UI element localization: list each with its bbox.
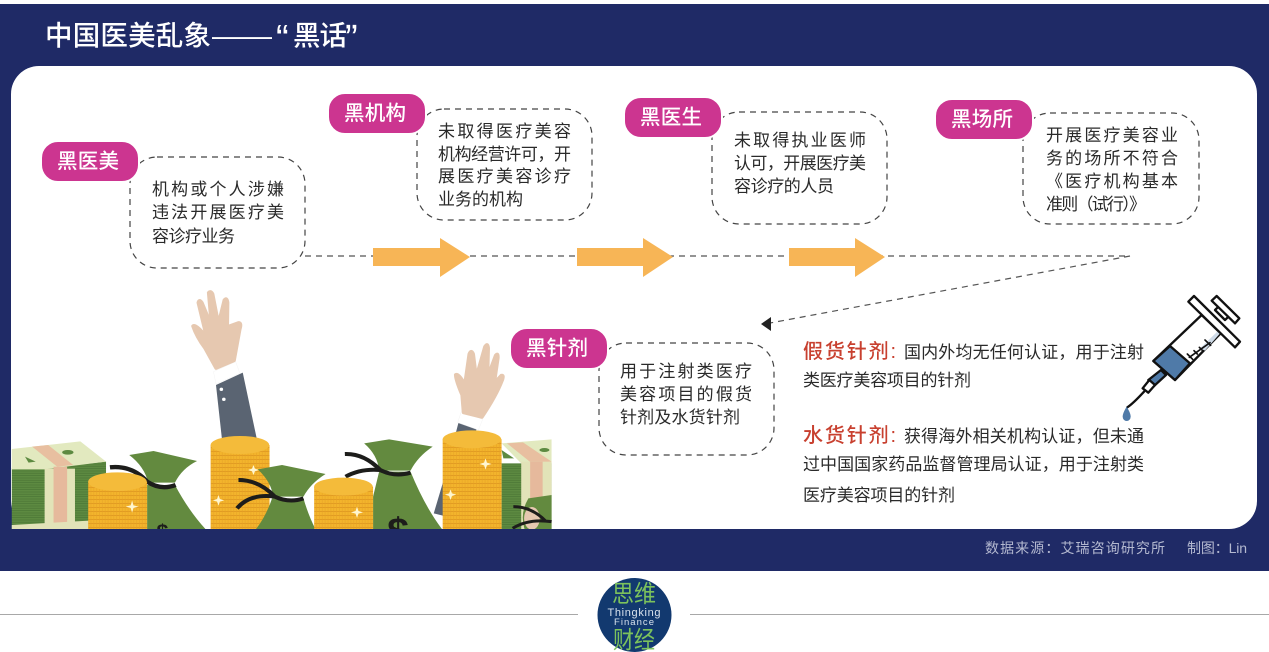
icon: coin stack two xyxy=(211,436,270,532)
panel: 黑医美: 黑医美 xyxy=(57,150,119,173)
icon: coin stack three xyxy=(314,478,373,532)
icon: third money bag xyxy=(344,439,442,529)
panel: 黑针剂: 用于注射类医疗 xyxy=(620,362,752,381)
text block: 假货针剂 definition xyxy=(803,340,1144,390)
panel: 黑医美 xyxy=(41,141,305,268)
text block: 假货针剂 definition: 类医疗美容项目的针剂 xyxy=(803,371,971,390)
arrow: first orange arrow xyxy=(373,238,470,277)
footer divider right xyxy=(690,614,1269,615)
title: 黑话 xyxy=(293,20,347,51)
panel: 黑医生: 未取得执业医师 xyxy=(734,131,866,150)
title: —— xyxy=(212,20,273,51)
panel: 黑医美: 违法开展医疗美 xyxy=(152,203,284,222)
panel: 黑医生: 容诊疗的人员 xyxy=(734,177,834,196)
panel: 黑机构: 未取得医疗美容 xyxy=(438,122,571,141)
illustration: hands, coins and money bags xyxy=(12,292,552,552)
logo: 思维财经 Thingking Finance: Finance xyxy=(614,617,654,628)
icon: first money bag xyxy=(110,451,206,529)
source credit xyxy=(985,540,1247,556)
panel: 黑场所: 《医疗机构基本 xyxy=(1046,172,1178,191)
arrow: second orange arrow xyxy=(577,238,673,277)
panel: 黑医美: 机构或个人涉嫌 xyxy=(152,180,284,199)
arrow: third orange arrow xyxy=(789,238,885,277)
icon: coin stack four xyxy=(443,430,502,532)
panel: 黑针剂: 黑针剂 xyxy=(526,337,588,360)
panel: 黑机构: 机构经营许可，开 xyxy=(438,145,571,164)
panel: 黑场所: 开展医疗美容业 xyxy=(1046,126,1178,145)
title: “ xyxy=(276,18,289,60)
icon: left banknote stack xyxy=(12,441,106,530)
icon: right banknote stack xyxy=(502,439,552,530)
text block: 水货针剂 definition: 水货针剂: xyxy=(803,424,896,447)
panel: 黑机构 xyxy=(328,93,592,220)
logo: 思维财经 Thingking Finance: 思维 xyxy=(612,581,656,608)
source credit: 数据来源：艾瑞咨询研究所 xyxy=(985,540,1165,556)
panel: 黑针剂: 美容项目的假货 xyxy=(620,385,752,404)
icon: second raised hand xyxy=(434,345,503,520)
panel: 黑场所 xyxy=(935,99,1199,224)
text block: 水货针剂 definition: 获得海外相关机构认证，但未通 xyxy=(904,427,1144,446)
panel: 黑机构: 展医疗美容诊疗 xyxy=(438,167,571,186)
icon: first money bag: $ xyxy=(156,521,169,543)
panel: 黑机构: 黑机构 xyxy=(344,102,406,125)
icon: third money bag: $ xyxy=(387,511,409,552)
panel: 黑医美: 容诊疗业务 xyxy=(152,227,235,246)
panel: 黑针剂 xyxy=(510,328,774,455)
panel: 黑机构: 业务的机构 xyxy=(438,190,523,209)
text block: 假货针剂 definition: 假货针剂: xyxy=(803,340,896,363)
icon: syringe xyxy=(1123,296,1240,421)
panel: 黑场所: 黑场所 xyxy=(951,108,1013,131)
icon: raised hand with suit sleeve xyxy=(193,292,257,440)
text block: 水货针剂 definition: 医疗美容项目的针剂 xyxy=(803,486,955,505)
panel: 黑针剂: 针剂及水货针剂 xyxy=(620,408,740,427)
text block: 水货针剂 definition xyxy=(803,424,1144,505)
panel: 黑医生: 认可，开展医疗美 xyxy=(734,154,866,173)
panel: 黑场所: 务的场所不符合 xyxy=(1046,149,1178,168)
panel: 黑医生: 黑医生 xyxy=(640,106,702,129)
icon: coin stack one xyxy=(88,472,147,532)
title: 中国医美乱象 xyxy=(45,20,211,51)
icon: second money bag xyxy=(237,465,326,530)
source credit: 制图：Lin xyxy=(1187,540,1247,556)
text block: 假货针剂 definition: 国内外均无任何认证，用于注射 xyxy=(904,343,1144,362)
white content panel xyxy=(11,66,1257,529)
panel: 黑场所: 准则（试行）》 xyxy=(1046,195,1146,214)
arrowhead: end of dashed connector xyxy=(761,317,771,331)
text block: 水货针剂 definition: 过中国国家药品监督管理局认证，用于注射类 xyxy=(803,455,1144,474)
logo: 思维财经 Thingking Finance xyxy=(598,578,672,652)
panel: 黑医生 xyxy=(624,97,887,224)
title: ” xyxy=(345,18,358,60)
footer divider left xyxy=(0,614,578,615)
logo: 思维财经 Thingking Finance: Thingking xyxy=(608,607,660,619)
title xyxy=(45,18,358,60)
dashed connector line xyxy=(305,256,1130,323)
